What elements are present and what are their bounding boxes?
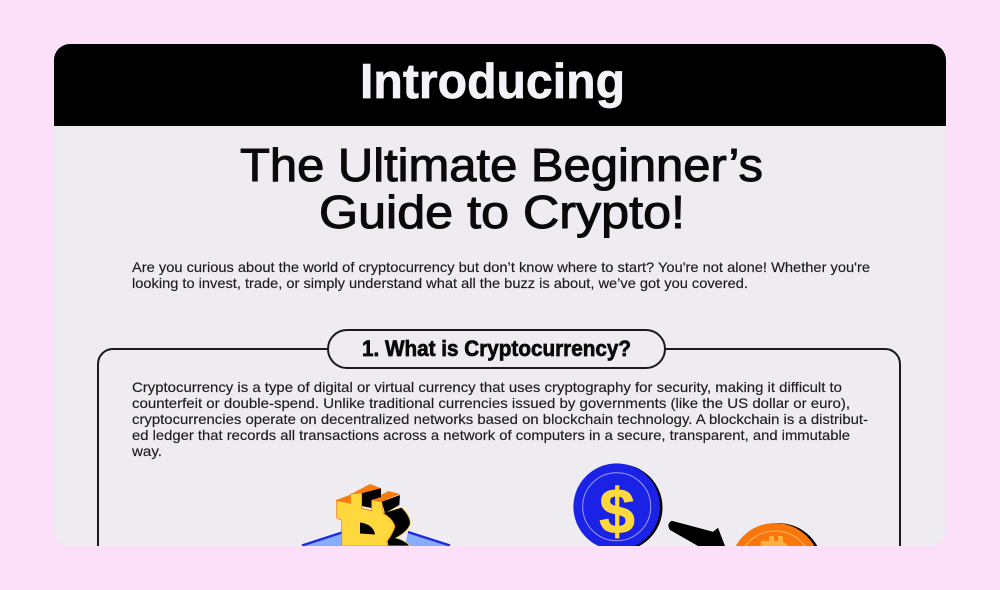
section body text: Cryptocurrency is a type of digital or virtual currency that uses cryptography for security, making it difficult to	[132, 379, 842, 395]
icon: bitcoin coin: B	[758, 532, 792, 585]
icon: bitcoin coin	[736, 523, 818, 546]
section body text: ed ledger that records all transactions across a network of computers in a secure, transparent, and immutable	[132, 427, 850, 443]
heading: Introducing: Introducing	[360, 55, 625, 109]
header banner	[54, 44, 946, 126]
section heading pill: 1. What is Cryptocurrency?	[362, 336, 631, 361]
section body text	[131, 379, 868, 459]
icon: isometric bitcoin on platform	[302, 484, 450, 546]
intro text: Are you curious about the world of cryptocurrency but don’t know where to start? You're not alone! Whether you're	[132, 259, 870, 275]
section body text: cryptocurrencies operate on decentralized networks based on blockchain technology. A blockchain is a distribut-	[132, 411, 868, 427]
title	[240, 139, 763, 238]
icon: dollar coin	[573, 463, 662, 551]
title: Guide to Crypto!	[319, 186, 685, 238]
intro text	[132, 259, 870, 291]
arrow: dollar to bitcoin	[668, 521, 725, 546]
panel: section 1 outline	[98, 349, 900, 560]
icon: dollar coin: $	[599, 475, 635, 547]
intro text: looking to invest, trade, or simply understand what all the buzz is about, we’ve got you covered.	[132, 275, 748, 291]
title: The Ultimate Beginner’s	[240, 139, 763, 191]
section body text: way.	[131, 443, 162, 459]
section body text: counterfeit or double-spend. Unlike traditional currencies issued by governments (like the US dollar or euro),	[132, 395, 850, 411]
section heading pill	[328, 330, 665, 368]
